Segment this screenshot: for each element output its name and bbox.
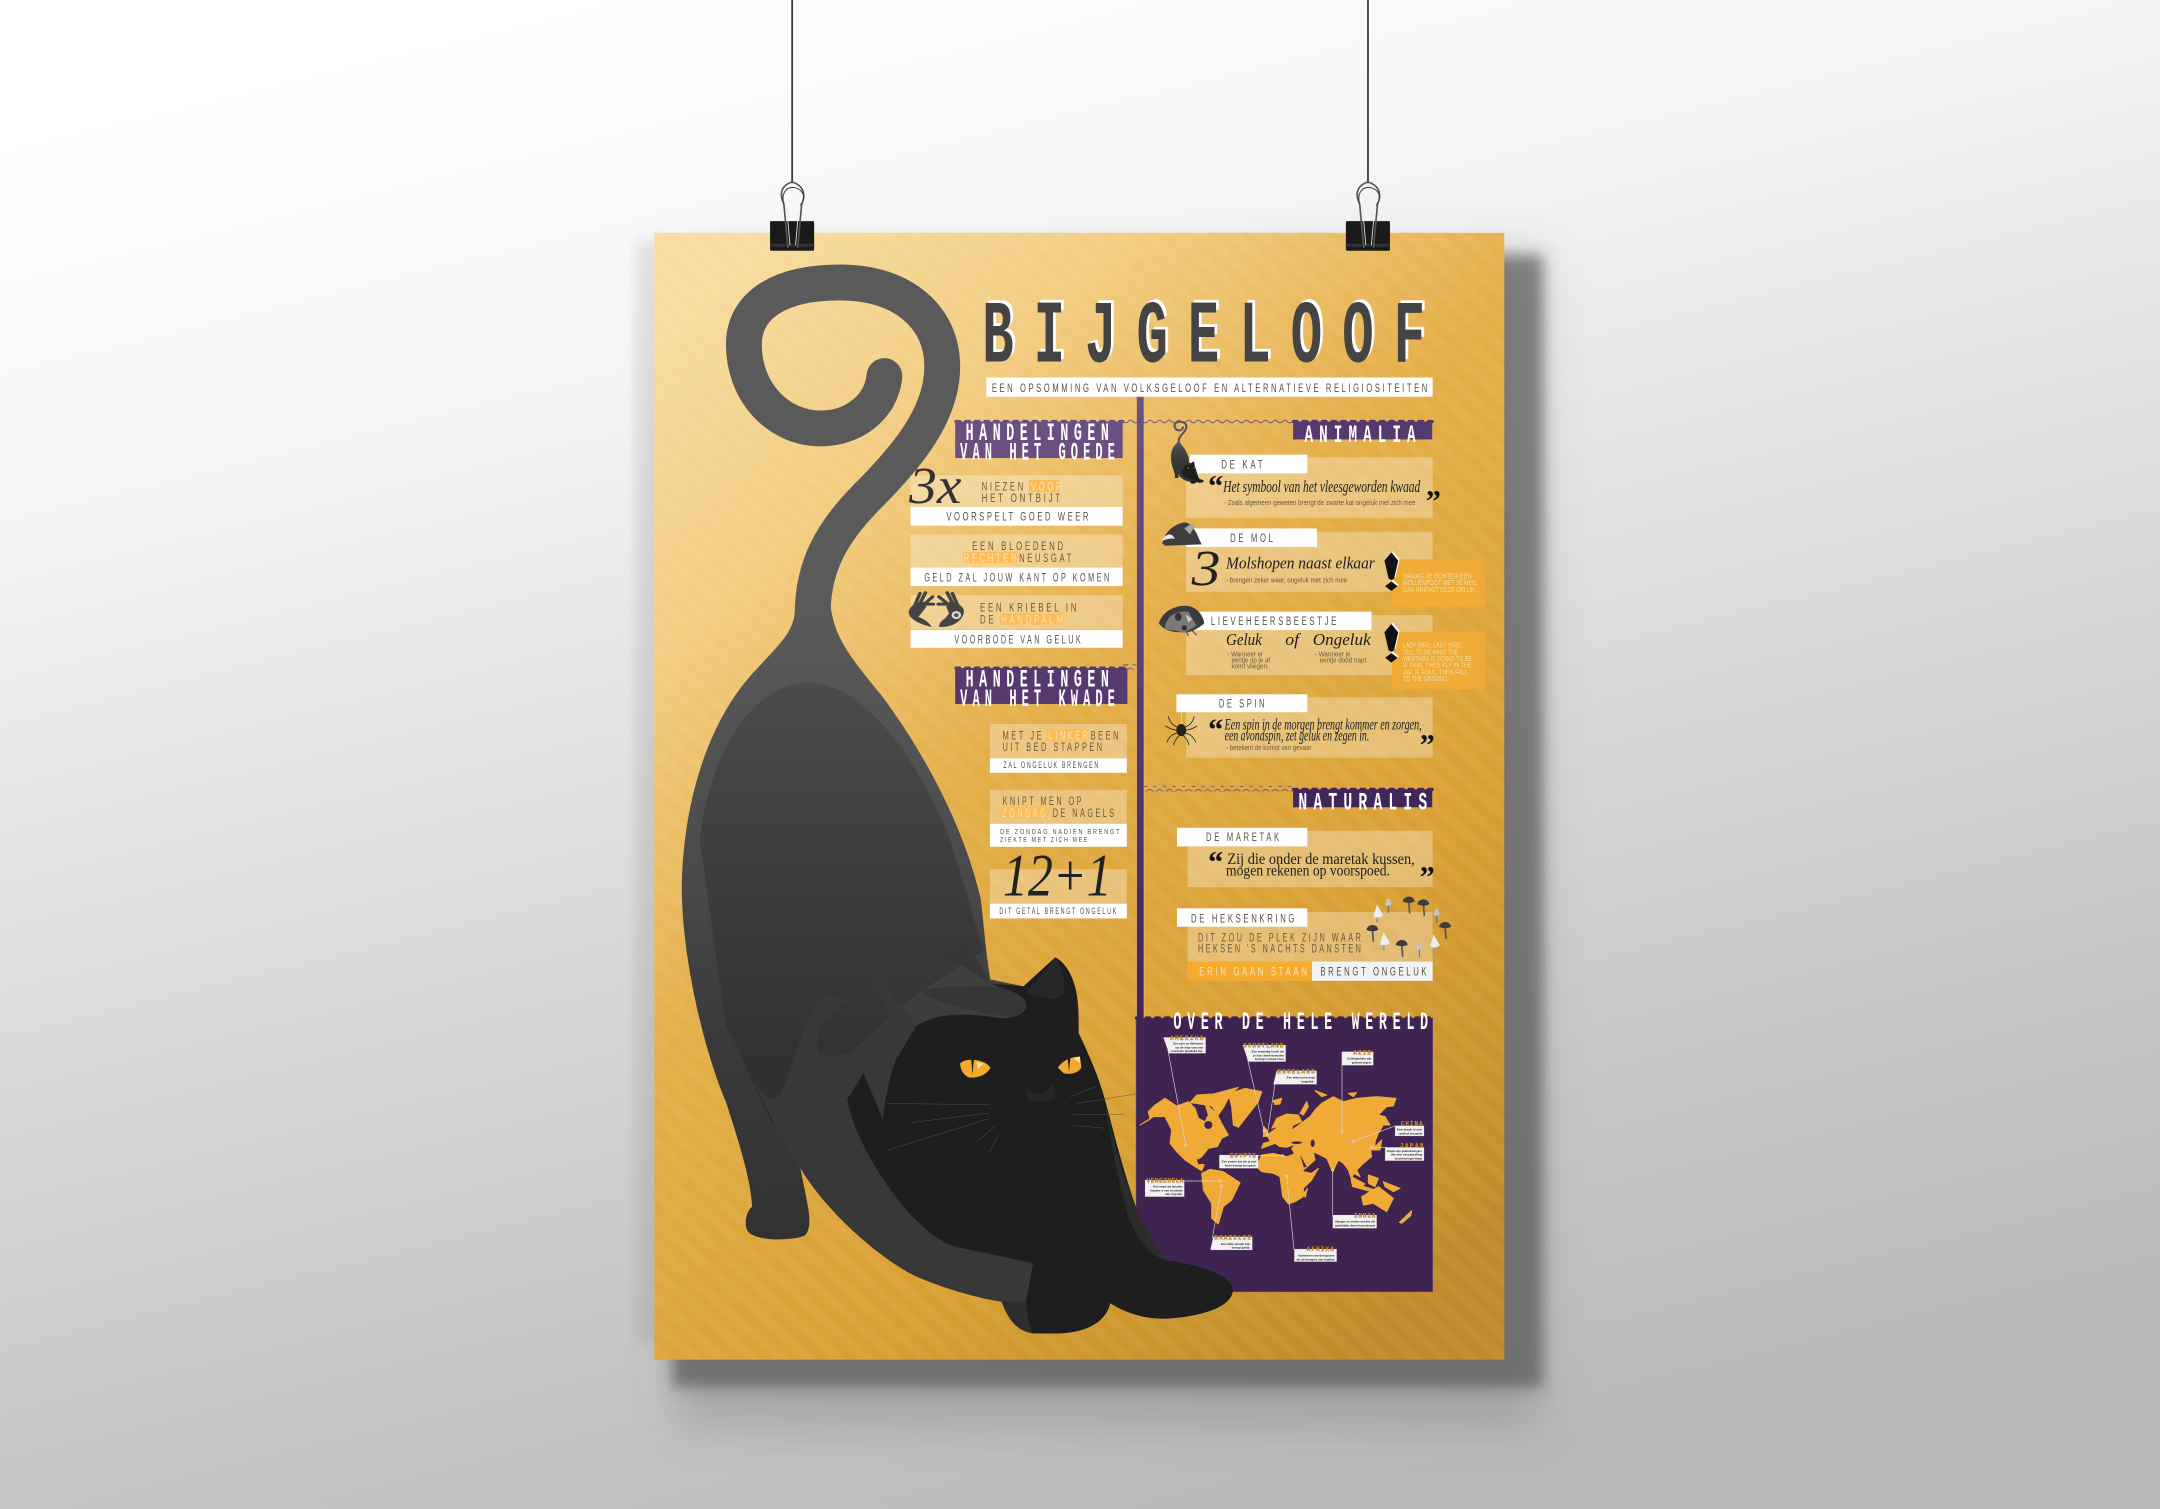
panel: lieveheersbeestje: LIEVEHEERSBEESTJE — [1211, 614, 1339, 628]
panel: lieveheersbeestje: Geluk — [1226, 630, 1262, 649]
panel: de heksenkring: HEKSEN 'S NACHTS DANSTEN — [1198, 942, 1363, 956]
callout: schotland: brengt onheil mee — [1255, 1057, 1284, 1061]
panel: de kat: ” — [1426, 484, 1441, 518]
panel: de mol: DE MOL — [1230, 531, 1276, 545]
panel: bloedend neusgat: EEN BLOEDEND — [972, 539, 1066, 553]
callout: venezuela: VENEZUELA — [1147, 1178, 1184, 1185]
note: lady bird: TO THE GROUND. — [1403, 674, 1448, 683]
note: molenpoot: MOLLENPOOT MET JE MEE, — [1403, 578, 1477, 587]
panel: lieveheersbeestje: komt vliegen. — [1232, 661, 1269, 670]
panel: de spin: een avondspin, zet geluk en zegen in. — [1225, 727, 1369, 744]
panel: lieveheersbeestje: Ongeluk — [1313, 630, 1371, 649]
panel: de kat: Het symbool van het vleesgeworden kwaad — [1223, 477, 1421, 496]
callout: schotland: je huis heeft betreden — [1252, 1053, 1284, 1057]
panel: de heksenkring — [1177, 897, 1451, 981]
panel: de spin — [1165, 693, 1435, 762]
panel: de maretak: “ — [1208, 845, 1223, 879]
callout: venezuela: houden is een voorbode — [1150, 1188, 1183, 1192]
heading: handelingen van het goede — [955, 420, 1123, 467]
note: lady bird: WEATHER IS GOING TO BE. — [1403, 654, 1473, 663]
panel: kriebel in de handpalm: VOORBODE VAN GELUK — [954, 632, 1083, 646]
panel: de heksenkring: DIT ZOU DE PLEK ZIJN WAAR — [1198, 931, 1363, 945]
callout: japan: beschermt tegen kwaad — [1395, 1156, 1422, 1160]
heading: handelingen van het kwade: VAN HET KWADE — [960, 686, 1120, 714]
callout: afrika: AFRIKA — [1307, 1246, 1334, 1253]
callout: amerika: AMERIKA — [1170, 1035, 1204, 1042]
callout: egypte: kruist brengt kan geluk. — [1225, 1163, 1257, 1167]
callout: engeland: ongeluk. — [1301, 1080, 1315, 1084]
icon: mole — [1162, 522, 1202, 546]
callout: venezuela: Een vogel als huisdier — [1153, 1184, 1183, 1188]
callout: egypte — [1219, 1153, 1258, 1168]
note: lady bird: AIR. IF FOUL, THEN FALL — [1403, 667, 1468, 676]
panel: lieveheersbeestje: - Wanneer je — [1315, 650, 1351, 659]
panel: bloedend neusgat — [911, 535, 1123, 586]
callout: amerika: Een spin op Halloween — [1173, 1042, 1203, 1046]
callout: engeland: Een witte kat brengt — [1287, 1076, 1315, 1080]
subtitle — [986, 377, 1433, 397]
heading: handelingen van het goede: HANDELINGEN — [966, 420, 1114, 448]
panel: kriebel in de handpalm: DE HANDPALM — [980, 612, 1065, 626]
callout: afrika: als de brengers van ongeluk — [1297, 1257, 1335, 1261]
panel: de spin: - betekent de komst van gevaar — [1226, 743, 1312, 752]
panel: de maretak: Zij die onder de maretak kussen, — [1227, 851, 1415, 868]
note: lady bird: LADY BIRD, LADY BIRD, — [1403, 640, 1462, 649]
black cat illustration — [682, 282, 1233, 1333]
callout: schotland: SCHOTLAND — [1243, 1043, 1284, 1050]
callout: azie: geluksbrengers — [1352, 1060, 1372, 1064]
central vertical bar — [1136, 397, 1144, 1019]
panel: 3x niezen: NIEZEN VOOR — [982, 479, 1064, 493]
heading: handelingen van het kwade: HANDELINGEN — [966, 667, 1114, 695]
panel: lieveheersbeestje — [1159, 606, 1485, 689]
callout: japan: Vogels zijn geluksbrengers — [1387, 1149, 1422, 1153]
panel: zondag nagels — [990, 790, 1127, 847]
callout: japan — [1385, 1143, 1424, 1161]
callout: azie — [1342, 1049, 1373, 1065]
callout: brazilie: BRAZILIE — [1214, 1234, 1251, 1241]
callout: venezuela: van ongeluk. — [1165, 1192, 1183, 1196]
callout: brazilie: brengt geluk. — [1232, 1246, 1250, 1250]
panel: de mol: 3 — [1190, 541, 1221, 597]
icon: hands — [909, 593, 964, 627]
callout: egypte: EGYPTE — [1230, 1153, 1256, 1160]
heading: animalia — [1293, 422, 1433, 450]
panel: lieveheersbeestje: eentje op je af — [1232, 656, 1271, 665]
callout: india: INDIA — [1354, 1213, 1376, 1220]
icon: ladybird — [1159, 606, 1204, 636]
panel: kriebel in de handpalm — [909, 593, 1123, 648]
3x number: 3x — [908, 457, 962, 515]
panel: 3x niezen — [908, 457, 1123, 526]
binder clip left — [770, 182, 814, 251]
callout: azie: AZIE — [1353, 1049, 1371, 1056]
title: BIJGELOOF — [982, 287, 1445, 389]
panel: de mol — [1162, 522, 1485, 607]
panel: lieveheersbeestje: eentje dood trapt. — [1320, 656, 1368, 665]
binder clip right — [1346, 182, 1390, 251]
panel: 3x niezen: HET ONTBIJT — [982, 491, 1063, 505]
callout: india: goddelijke dieren beschouwd — [1335, 1223, 1375, 1227]
panel: de kat: - Zoals algemeen geweten brengt de zwarte kat ongeluk met zich mee — [1224, 498, 1415, 507]
icon: spider — [1165, 693, 1197, 745]
panel: kriebel in de handpalm: EEN KRIEBEL IN — [980, 601, 1079, 615]
panel: de maretak: DE MARETAK — [1206, 830, 1282, 844]
text: VAN HET GOEDE — [960, 439, 1120, 467]
callout: china: symbool van geluk — [1398, 1131, 1422, 1135]
panel: de maretak — [1177, 828, 1435, 894]
callout: engeland: ENGELAND — [1277, 1068, 1315, 1075]
panel: de spin: Een spin in de morgen brengt kommer en zorgen, — [1224, 716, 1422, 733]
panel: zondag nagels: KNIPT MEN OP — [1003, 794, 1084, 808]
wavy divider kwade — [1123, 664, 1136, 670]
heading: animalia: ANIMALIA — [1305, 422, 1422, 450]
callout: china: Een draak is een — [1397, 1128, 1422, 1132]
panel: de heksenkring: DE HEKSENKRING — [1191, 911, 1297, 925]
callout: brazilie — [1210, 1234, 1252, 1250]
hanging string right — [1367, 0, 1369, 183]
panel: linkerbeen — [990, 724, 1127, 773]
callout: engeland — [1273, 1068, 1317, 1084]
callout: afrika: Kameleons worden gezien — [1298, 1254, 1335, 1258]
panel: zondag nagels: DE ZONDAG NADIEN BRENGT — [1000, 827, 1121, 836]
map heading: OVER DE HELE WERELD — [1173, 1009, 1434, 1037]
panel: de heksenkring: ERIN GAAN STAAN — [1199, 965, 1309, 979]
heading: handelingen van het kwade — [955, 667, 1127, 714]
panel: de maretak: ” — [1420, 860, 1435, 894]
panel: de spin: ” — [1420, 728, 1435, 762]
icon: mushroom ring — [1366, 897, 1451, 957]
panel: zondag nagels: ZONDAG DE NAGELS — [1002, 806, 1117, 820]
note: molenpoot: DAN BRENGT DEZE GELUK. — [1403, 585, 1476, 594]
panel: bloedend neusgat: RECHTERNEUSGAT — [964, 551, 1074, 565]
panel: lieveheersbeestje: - Wanneer er — [1227, 650, 1264, 659]
callout: india: Slangen en draken worden als — [1335, 1220, 1375, 1224]
callout: japan: die een verzameling — [1391, 1153, 1422, 1157]
panel: 12+1: 12+1 — [1003, 842, 1112, 909]
note: lady bird: TELL TO ME WHAT THE — [1403, 647, 1458, 656]
panel: de spin: “ — [1208, 713, 1223, 747]
panel: de mol: Molshopen naast elkaar — [1225, 553, 1375, 572]
panel: de kat — [1171, 422, 1441, 518]
panel: over de hele wereld map — [1136, 1009, 1434, 1292]
poster — [654, 233, 1504, 1360]
wavy divider naturalis — [1143, 786, 1298, 791]
callout: schotland: Een inwendig hoofd die — [1252, 1050, 1284, 1054]
callout: china: CHINA — [1401, 1121, 1423, 1128]
callout: brazilie: Een witte vlinder kan — [1221, 1242, 1251, 1246]
icon: small cat — [1171, 422, 1204, 484]
world map — [1140, 1035, 1424, 1262]
hanging string left — [791, 0, 793, 183]
callout: japan: JAPAN — [1400, 1143, 1424, 1150]
panel: de spin: DE SPIN — [1219, 696, 1267, 710]
note: lady bird — [1384, 624, 1485, 689]
panel: bloedend neusgat: GELD ZAL JOUW KANT OP KOMEN — [924, 570, 1112, 584]
panel: de kat: DE KAT — [1221, 457, 1265, 471]
callout: schotland — [1243, 1043, 1286, 1062]
callout: afrika — [1294, 1246, 1337, 1262]
panel: linkerbeen: ZAL ONGELUK BRENGEN — [1003, 760, 1100, 770]
note: molenpoot — [1384, 552, 1485, 607]
callout: amerika: op de trap van een — [1175, 1045, 1204, 1049]
note: molenpoot: DRAAG JE ECHTER EEN — [1403, 572, 1472, 581]
callout lines — [1166, 1040, 1395, 1250]
callout: amerika: overleden familielid zijn. — [1171, 1049, 1203, 1053]
panel: zondag nagels: ZIEKTE MET ZICH MEE — [1000, 835, 1089, 844]
panel: de kat: “ — [1208, 469, 1223, 503]
callout: india — [1333, 1213, 1377, 1228]
poster shadow — [636, 241, 1543, 1426]
panel: lieveheersbeestje: of — [1285, 630, 1301, 649]
panel: 3x niezen: VOORSPELT GOED WEER — [946, 510, 1091, 524]
panel: de mol: - brengen zeker waar, ongeluk met zich mee — [1226, 576, 1347, 585]
panel: de maretak: mogen rekenen op voorspoed. — [1226, 862, 1390, 879]
heading: naturalis: NATURALIS — [1298, 789, 1433, 817]
note: lady bird: IF FAIR, THEN FLY IN THE — [1403, 661, 1472, 670]
callout: venezuela — [1145, 1178, 1184, 1197]
wavy divider top — [1119, 419, 1298, 424]
subtitle: EEN OPSOMMING VAN VOLKSGELOOF EN ALTERNATIEVE RELIGIOSITEITEN — [992, 383, 1430, 395]
panel: de heksenkring: BRENGT ONGELUK — [1320, 965, 1429, 979]
callout: china — [1395, 1121, 1424, 1136]
panel: linkerbeen: MET JE LINKERBEEN — [1003, 728, 1121, 742]
callout: amerika — [1163, 1035, 1206, 1053]
heading: naturalis — [1293, 789, 1433, 817]
panel: 12+1: DIT GETAL BRENGT ONGELUK — [999, 906, 1118, 916]
callout: azie: Schildpadden zijn — [1347, 1057, 1372, 1061]
callout: egypte: Een zwarte kat die je pad — [1222, 1160, 1257, 1164]
panel: linkerbeen: UIT BED STAPPEN — [1003, 740, 1105, 754]
